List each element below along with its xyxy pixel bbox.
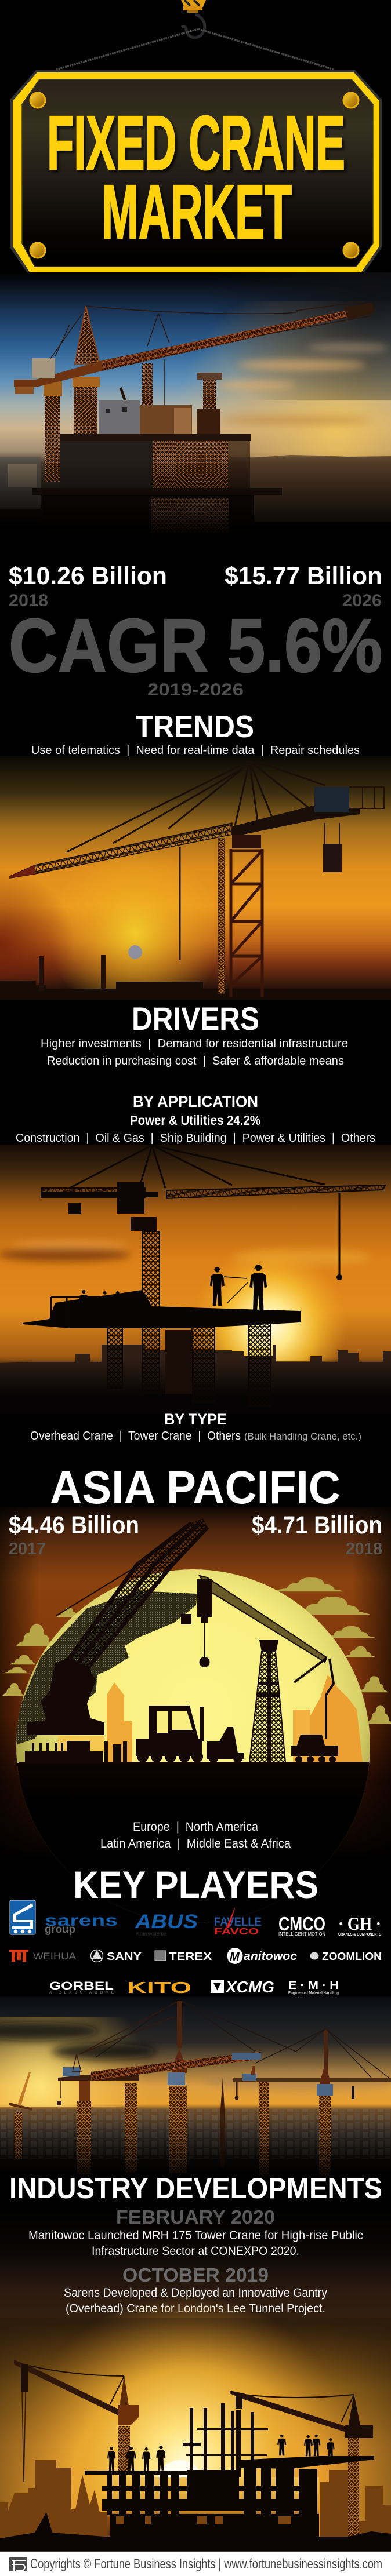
heading: drivers: DRIVERS <box>132 1000 259 1037</box>
sky <box>0 756 391 1000</box>
small workers <box>79 1290 122 1315</box>
heading: trends: TRENDS <box>136 709 254 744</box>
icon: crane hook <box>181 0 206 38</box>
value 2018: 2018 <box>346 1540 382 1558</box>
development: october 2019: Sarens Developed & Deployed an Innovative Gantry <box>64 2286 327 2300</box>
thin mast <box>220 2077 225 2167</box>
panel: industry developments background <box>0 2182 391 2551</box>
sun <box>191 1247 347 1361</box>
sky <box>0 272 391 556</box>
scaffold tower columns <box>183 2403 268 2537</box>
counter jib <box>232 806 360 837</box>
development: october 2019: (Overhead) Crane for London's Lee Tunnel Project. <box>66 2302 325 2315</box>
other regions <box>100 1820 291 1850</box>
title <box>47 100 345 254</box>
logo: abus: ABUS <box>135 1911 198 1933</box>
heading: key players: KEY PLAYERS <box>73 1863 318 1906</box>
suspended load <box>323 823 342 872</box>
sign outer edge <box>10 70 382 275</box>
rivet bottom left <box>30 243 45 258</box>
sun glow <box>48 846 222 997</box>
sky <box>0 1996 391 2185</box>
distant small cranes <box>39 955 106 991</box>
logo: gorbel: A CLASS ABOVE <box>49 1991 114 1995</box>
sun <box>128 945 142 959</box>
crane stays <box>50 301 371 406</box>
drivers list: Reduction in purchasing cost | Safer & affordable means <box>47 1055 344 1067</box>
logo: cmco: INTELLIGENT MOTION <box>278 1932 325 1937</box>
logo: sarens: sarens <box>45 1911 118 1929</box>
rivet top left <box>30 93 45 108</box>
sign yellow frame <box>13 72 379 273</box>
sign panel <box>22 79 373 267</box>
cable right <box>198 29 334 70</box>
sunset glow <box>133 301 391 457</box>
logo: sarens: group <box>45 1923 75 1936</box>
type list: Overhead Crane | Tower Crane | Others <box>30 1430 241 1442</box>
logo: cmco: CMCO <box>278 1913 325 1934</box>
distant skyline <box>0 981 391 1000</box>
logo: gh cranes: CRANES & COMPONENTS <box>338 1933 381 1937</box>
tower head <box>232 835 261 848</box>
logo: weihua: WEIHUA <box>33 1951 77 1962</box>
other regions: Europe | North America <box>133 1820 258 1834</box>
market value 2026 <box>225 562 382 610</box>
continents <box>12 1591 197 1744</box>
logo: weihua <box>9 1950 77 1962</box>
platform supports <box>107 1322 270 1406</box>
value 2017: $4.46 Billion <box>9 1511 139 1539</box>
value 2017: 2017 <box>9 1540 46 1558</box>
footer band <box>0 2551 391 2576</box>
clouds <box>215 343 389 424</box>
left crane <box>57 2001 180 2174</box>
scaffold lit windows <box>107 2477 319 2535</box>
ground <box>0 2512 391 2551</box>
panel: tower crane at sunset photo <box>0 756 391 1000</box>
tower crane <box>41 1145 385 1391</box>
buildings <box>58 1675 363 1762</box>
development: february 2020: Infrastructure Sector at CONEXPO 2020. <box>92 2245 299 2258</box>
logo: terex: TEREX <box>169 1951 212 1962</box>
scaffold structure <box>85 2456 374 2537</box>
cab <box>314 787 349 812</box>
second crane <box>125 2083 137 2172</box>
type list <box>30 1430 361 1442</box>
jib <box>10 823 232 878</box>
sky <box>0 1507 391 1860</box>
logo: favelle favco: FAVCO <box>214 1927 259 1937</box>
logo: sarens <box>10 1900 118 1936</box>
drivers list: Higher investments | Demand for residential infrastructure <box>41 1037 348 1050</box>
development: october 2019 <box>64 2264 327 2315</box>
logo: terex <box>155 1951 212 1962</box>
left crane <box>14 2360 139 2482</box>
rivet bottom right <box>343 243 359 258</box>
drivers list <box>41 1037 348 1067</box>
logo: kito: KITO <box>127 1979 191 1996</box>
dark clouds <box>0 2022 157 2060</box>
globe <box>16 1569 370 1923</box>
panel: footer <box>0 2551 391 2576</box>
cloud band <box>0 1242 371 1266</box>
red haze <box>0 869 75 997</box>
market value 2026: 2026 <box>342 591 382 610</box>
heading: asia pacific: ASIA PACIFIC <box>50 1462 341 1513</box>
globe lower shadow <box>12 1763 377 1931</box>
other regions: Latin America | Middle East & Africa <box>100 1837 291 1850</box>
development: february 2020: FEBRUARY 2020 <box>116 2206 275 2228</box>
fade to black <box>0 2118 391 2185</box>
hook cable <box>179 847 181 960</box>
right crane far <box>255 2030 389 2196</box>
logo: sany <box>90 1950 142 1962</box>
heading: by type: BY TYPE <box>164 1411 227 1428</box>
logo: manitowoc: M <box>230 1951 240 1963</box>
market value 2018: 2018 <box>9 591 48 610</box>
fade to black <box>0 458 391 556</box>
application list: Construction | Oil & Gas | Ship Building | Power & Utilities | Others <box>16 1132 375 1145</box>
left crane dock <box>25 1741 127 1763</box>
panel: city crane skyline photo <box>0 1996 391 2196</box>
lower city shadow <box>0 1359 391 1414</box>
sun disc <box>157 2460 203 2506</box>
big tractor <box>136 1706 204 1762</box>
crane jib <box>102 305 371 371</box>
logo: gorbel: GORBEL <box>49 1980 114 1992</box>
logo: favelle favco <box>214 1908 262 1937</box>
heading: by application: BY APPLICATION <box>133 1093 258 1110</box>
workers left group <box>107 2446 165 2471</box>
panel: globe construction illustration <box>0 1507 391 1931</box>
right crane tower <box>249 1640 285 1762</box>
panel: hanging title sign <box>10 0 382 275</box>
jib tip <box>10 865 35 878</box>
right side sunset <box>203 2071 391 2090</box>
ladder <box>218 839 225 994</box>
logo: zoomlion: ZOOMLION <box>322 1951 382 1962</box>
logo: sany: SANY <box>107 1951 142 1962</box>
rivet top right <box>343 93 359 108</box>
clouds <box>2 1577 391 1724</box>
building <box>32 373 282 550</box>
footer rule <box>0 2551 391 2552</box>
sun glow <box>17 2295 374 2551</box>
distant city and hills <box>249 455 391 522</box>
worker left <box>210 1267 225 1306</box>
panel: company logos <box>9 1900 382 1996</box>
panel: construction silhouette illustration <box>0 2295 391 2551</box>
logo: gh cranes: · GH · <box>338 1913 381 1934</box>
panel: workers on platform photo <box>0 1145 391 1414</box>
market value 2018 <box>9 562 167 610</box>
sky vignette <box>0 2318 391 2551</box>
distant city <box>0 2109 391 2159</box>
market value 2026: $15.77 Billion <box>225 562 382 590</box>
share callout: Power & Utilities 24.2% <box>130 1113 260 1128</box>
distant city left <box>0 457 41 509</box>
left crane <box>27 1518 208 1735</box>
icon: fortune business insights logo <box>9 2557 27 2571</box>
tower mast <box>230 849 263 997</box>
far left crane <box>9 2072 32 2159</box>
logo: manitowoc <box>227 1948 297 1964</box>
worker right <box>249 1265 267 1311</box>
logo: abus: Kransysteme <box>136 1931 166 1937</box>
trends list: Use of telematics | Need for real-time data | Repair schedules <box>31 744 360 757</box>
ground line <box>19 1762 369 1764</box>
small excavator <box>207 1727 244 1763</box>
railing <box>349 787 384 808</box>
dark corner <box>209 272 391 400</box>
side vignette <box>0 1507 391 1860</box>
sun glow <box>0 2017 151 2107</box>
logo: manitowoc: anitowoc <box>244 1950 297 1963</box>
cable left <box>56 29 198 70</box>
right crane near <box>233 2066 391 2196</box>
logo: gorbel <box>49 1980 114 1995</box>
sky <box>0 1145 391 1414</box>
development: february 2020 <box>28 2206 363 2258</box>
value 2018 <box>252 1511 382 1558</box>
measuring line <box>224 1277 248 1303</box>
logo: favelle favco: FAVELLE <box>214 1915 262 1929</box>
counter jib and cab <box>14 358 102 394</box>
right crane <box>230 2391 373 2537</box>
market value 2018: $10.26 Billion <box>9 562 167 590</box>
CAGR: 2019-2026 <box>147 680 244 699</box>
logo: emh <box>288 1980 339 1995</box>
city skyline <box>0 2460 391 2538</box>
platform <box>23 1290 301 1328</box>
logo: emh: Engineered Material Handling <box>288 1990 339 1995</box>
logo: emh: E · M · H <box>288 1980 339 1992</box>
right loader <box>291 1735 338 1763</box>
development: october 2019: OCTOBER 2019 <box>122 2264 269 2286</box>
type list: (Bulk Handling Crane, etc.) <box>244 1431 361 1442</box>
crane A-frame <box>75 306 100 364</box>
crane tower masts <box>44 363 153 482</box>
value 2017 <box>9 1511 139 1558</box>
hook block with cable and ball <box>181 1579 212 1667</box>
main crane <box>91 2001 296 2173</box>
scaffold windows <box>116 2516 291 2524</box>
A-frame and stays <box>67 761 325 852</box>
city skyline <box>0 1345 391 1402</box>
logo: xcmg: XCMG <box>225 1978 274 1996</box>
right crane boom <box>200 1576 334 1739</box>
workers right group <box>277 2435 335 2461</box>
jib end <box>344 303 374 319</box>
platform railing <box>51 1297 142 1327</box>
panel: crane at building photo <box>0 272 391 556</box>
development: february 2020: Manitowoc Launched MRH 175 Tower Crane for High-rise Public <box>28 2229 363 2242</box>
